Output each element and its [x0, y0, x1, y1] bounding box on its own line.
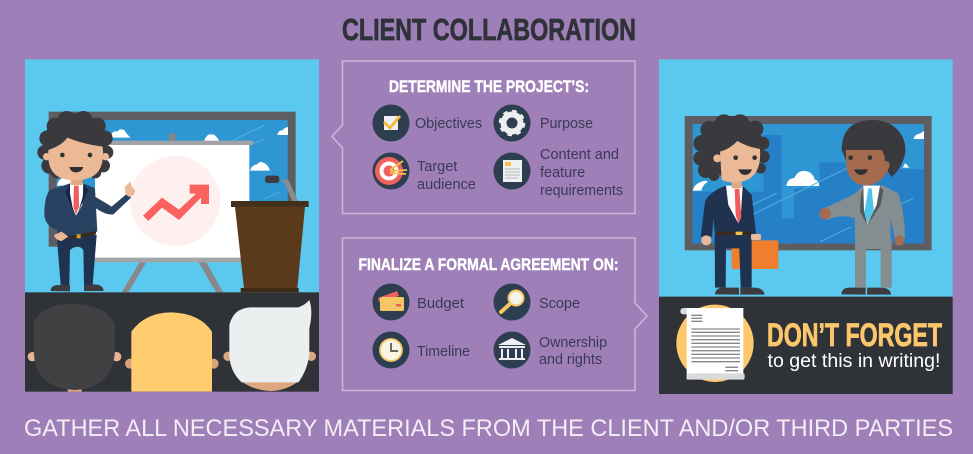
callout box [342, 238, 647, 390]
man with grey suit [819, 120, 905, 295]
icon: checkbox [372, 104, 410, 142]
label: and rights [539, 352, 602, 368]
label: audience [417, 177, 476, 193]
icon: credit card [372, 284, 410, 320]
icon: written contract [676, 305, 754, 382]
callout box [332, 61, 635, 214]
panel: handshake scene [659, 59, 953, 394]
chart icon: rising arrow [130, 156, 220, 246]
icon: gear [494, 104, 530, 142]
icon: document [494, 152, 530, 190]
audience band [25, 292, 319, 392]
panel: presentation scene [25, 59, 319, 392]
window with sky [49, 112, 296, 247]
presenter [37, 111, 135, 291]
reminder text: to get this in writing! [768, 351, 940, 372]
label: Timeline [417, 344, 470, 360]
label: Objectives [415, 116, 482, 132]
reminder band [659, 297, 953, 394]
title: CLIENT COLLABORATION [342, 12, 636, 47]
label: Ownership [539, 335, 607, 351]
briefcase [732, 240, 778, 269]
heading: FINALIZE A FORMAL AGREEMENT ON: [358, 255, 618, 274]
panel: determine the project [332, 61, 635, 214]
audience: white hair [223, 300, 316, 391]
label: Scope [539, 296, 580, 312]
icon: target [372, 152, 410, 190]
window with skyline [685, 116, 932, 250]
audience: blonde hair [125, 312, 219, 392]
label: Purpose [540, 116, 593, 132]
footer caption: GATHER ALL NECESSARY MATERIALS FROM THE CLIENT AND/OR THIRD PARTIES [24, 415, 953, 442]
icon: bank building [494, 332, 530, 368]
label: requirements [540, 183, 623, 199]
label [540, 147, 623, 199]
label [417, 159, 476, 193]
presentation board [95, 133, 253, 292]
label: Target [417, 159, 457, 175]
icon: clock [372, 332, 410, 368]
podium with microphone [231, 176, 309, 292]
label: Budget [417, 296, 464, 312]
man with curly hair [693, 114, 770, 295]
audience: dark hair [28, 304, 121, 392]
label: Content and [540, 147, 619, 163]
icon: magnifier [494, 284, 530, 320]
heading: DETERMINE THE PROJECT’S: [389, 77, 589, 96]
panel: finalize agreement [342, 238, 647, 390]
label [539, 335, 607, 368]
label: feature [540, 165, 585, 181]
